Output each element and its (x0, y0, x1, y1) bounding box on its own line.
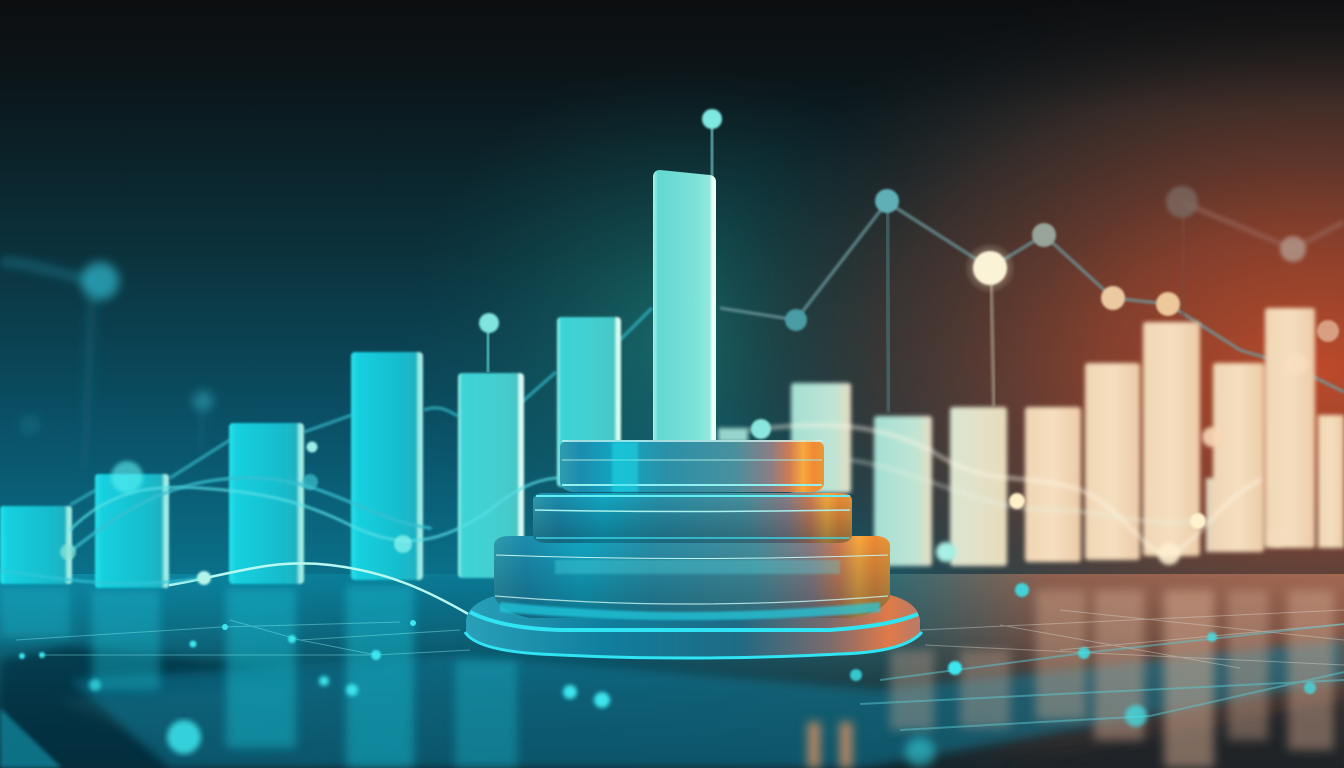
blurred far line chart: left (0, 262, 213, 470)
pin on teal bar (479, 313, 499, 372)
bar chart: pale and cream bars (718, 308, 1344, 566)
podium: base tier (465, 595, 922, 658)
floor reflections of bars (0, 585, 1334, 768)
line chart: right upper (720, 186, 1344, 412)
podium: third tier (494, 536, 890, 620)
bar chart: cyan bars (0, 317, 621, 588)
glowing nodes on chart (60, 353, 1308, 585)
floor grid (16, 610, 1344, 730)
floor nodes (19, 583, 1316, 767)
wavy data lines (0, 425, 1260, 615)
podium: second tier (533, 493, 852, 543)
main tall bar with pin (653, 109, 722, 440)
line chart: link through cyan bars (70, 308, 652, 505)
podium: top tier (560, 440, 824, 492)
floor (0, 574, 1344, 768)
stacked podium (465, 440, 922, 658)
